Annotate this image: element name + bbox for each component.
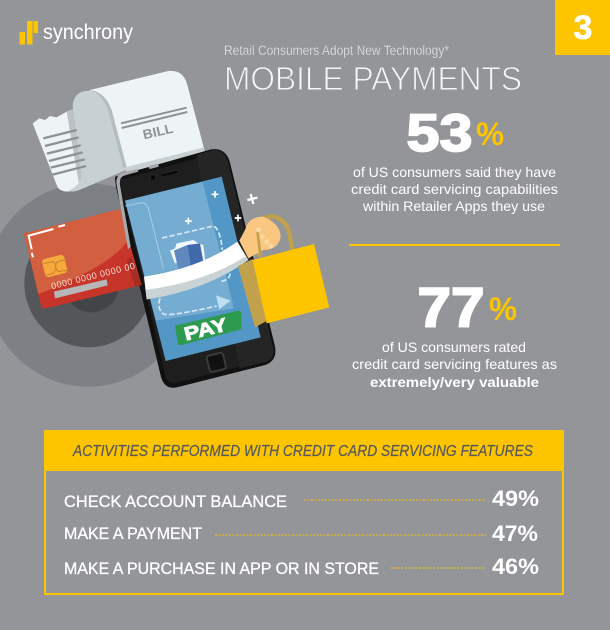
arm and hand — [144, 217, 281, 299]
row: check account balance: 49% — [492, 486, 539, 511]
illustration: payment scene — [0, 71, 329, 387]
shopping bag — [238, 244, 329, 327]
page number badge — [555, 0, 610, 55]
phone body — [117, 150, 274, 385]
text: 53 percent description — [351, 164, 558, 214]
bill: BILL — [141, 121, 175, 142]
text: 77 percent description: credit card servicing features as — [352, 356, 557, 372]
text: 77 percent description: extremely/very valuable — [370, 374, 539, 390]
row: check account balance: CHECK ACCOUNT BALANCE — [64, 492, 287, 511]
row: make a payment — [64, 521, 538, 546]
stat: 77 percent — [418, 276, 517, 338]
credit card: 0000 0000 0000 00 — [50, 261, 136, 291]
text: 53 percent description: credit card servicing capabilities — [351, 181, 558, 197]
row: make a payment: MAKE A PAYMENT — [64, 524, 202, 543]
page number badge: 3 — [574, 9, 592, 47]
stat: 77 percent: 77 — [418, 276, 484, 338]
stat: 53 percent — [406, 104, 504, 163]
section subheading: Retail Consumers Adopt New Technology* — [224, 43, 450, 58]
credit card — [24, 209, 142, 309]
stat: 53 percent: % — [476, 116, 504, 152]
panel header: ACTIVITIES PERFORMED WITH CREDIT CARD SERVICING FEATURES — [72, 443, 534, 460]
phone screen — [116, 164, 261, 372]
divider — [349, 244, 560, 246]
sparkle — [247, 194, 257, 204]
target circles — [0, 183, 190, 387]
row: make a purchase: 46% — [492, 554, 539, 579]
logo: synchrony: synchrony — [43, 21, 133, 44]
stat: 53 percent: 53 — [406, 104, 472, 163]
phone screen: PAY — [182, 314, 230, 345]
text: 53 percent description: within Retailer Apps they use — [362, 198, 545, 214]
shopping bag handle — [257, 216, 293, 257]
text: 77 percent description: of US consumers rated — [382, 339, 526, 355]
title: MOBILE PAYMENTS — [224, 61, 522, 98]
stat: 77 percent: % — [489, 291, 517, 327]
row: make a purchase: MAKE A PURCHASE IN APP OR IN STORE — [64, 559, 379, 578]
panel frame — [45, 431, 563, 594]
text: 77 percent description — [352, 339, 557, 390]
text: 53 percent description: of US consumers said they have — [353, 164, 556, 180]
row: check account balance — [64, 486, 539, 511]
row: make a purchase — [64, 554, 539, 579]
panel header — [44, 430, 564, 471]
bill — [33, 71, 205, 192]
row: make a payment: 47% — [492, 521, 538, 546]
panel: activities — [44, 430, 564, 594]
